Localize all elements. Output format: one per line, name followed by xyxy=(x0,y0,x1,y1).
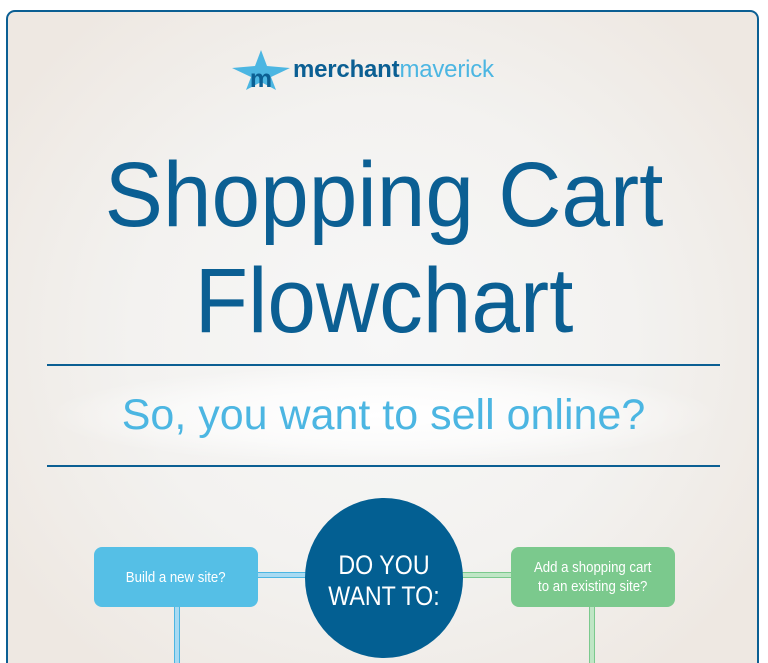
connector: right vertical xyxy=(589,606,595,663)
subtitle text: So, you want to sell online? xyxy=(122,391,645,439)
circle: do you want to: DO YOU xyxy=(338,550,430,580)
box: build a new site xyxy=(94,547,258,607)
title xyxy=(105,144,663,352)
logo text: merchantmaverick xyxy=(293,56,494,83)
box: add shopping cart xyxy=(511,547,675,607)
connector: left horizontal xyxy=(258,572,308,578)
circle: do you want to: WANT TO: xyxy=(328,581,440,611)
circle: do you want to xyxy=(305,498,463,658)
box: add shopping cart: Add a shopping cart xyxy=(534,559,652,576)
connector: right horizontal xyxy=(460,572,512,578)
box: build a new site: Build a new site? xyxy=(126,568,226,586)
connector: left vertical xyxy=(174,606,180,663)
title: Flowchart xyxy=(195,250,573,352)
icon: star logo xyxy=(232,50,290,90)
logo xyxy=(232,50,494,90)
title: Shopping Cart xyxy=(105,144,663,246)
box: add shopping cart: to an existing site? xyxy=(538,578,648,595)
subtitle band xyxy=(47,364,720,467)
